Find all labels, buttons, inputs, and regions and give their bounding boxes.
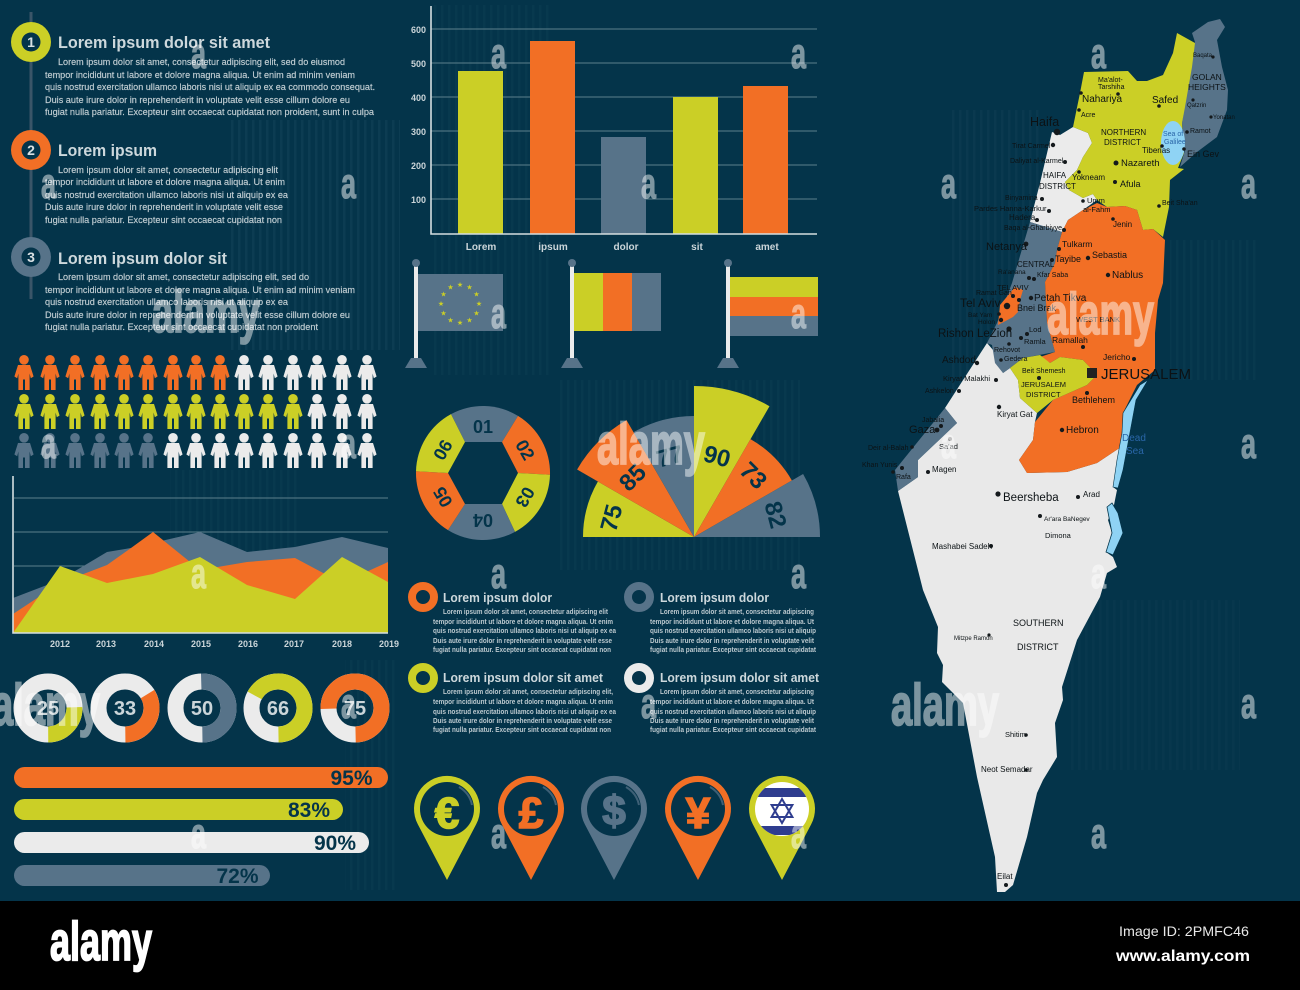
progress bars: 83%	[288, 799, 330, 822]
legend item: white: Lorem ipsum dolor sit amet	[660, 671, 820, 685]
legend item: lime: tempor incididunt ut labore et dolore magna aliqua. Ut enim	[433, 697, 613, 706]
map labels: Arad	[1083, 490, 1100, 499]
map labels: Yokneam	[1072, 173, 1105, 182]
map city dots	[891, 55, 1215, 887]
map labels: Shitim	[1005, 730, 1026, 739]
fan chart: 82	[759, 499, 791, 531]
watermarks: a	[491, 810, 507, 858]
watermarks: a	[341, 680, 357, 728]
map labels: DISTRICT	[1104, 138, 1141, 147]
district: northern	[1065, 33, 1195, 237]
area chart: 2012	[50, 639, 70, 649]
map labels: Dimona	[1045, 531, 1072, 540]
bar chart: 400	[411, 93, 426, 103]
watermarks: a	[791, 290, 807, 338]
map labels: DISTRICT	[1017, 642, 1059, 652]
watermarks: a	[1241, 160, 1257, 208]
area chart: 2017	[284, 639, 304, 649]
block 1: Duis aute irure dolor in reprehenderit in voluptate velit esse cillum dolore eu	[45, 95, 350, 105]
bar chart: 200	[411, 161, 426, 171]
legend item: white: fugiat nulla pariatur. Excepteur sint occaecat cupidatat	[650, 725, 816, 734]
map labels: Bat Yam	[968, 312, 992, 319]
legend item: slate: Duis aute irure dolor in reprehenderit in voluptate velit	[650, 636, 814, 645]
map labels: Kiryat Gat	[997, 410, 1033, 419]
bar chart: 100	[411, 195, 426, 205]
watermarks: alamy	[597, 412, 705, 477]
map labels: Sa'ad	[939, 442, 958, 451]
map labels: Tulkarm	[1062, 239, 1092, 249]
map labels: Netanya	[986, 241, 1028, 253]
block 1: quis nostrud exercitation ullamco laboris nisi ut aliquip ex ea commodo consequat.	[45, 82, 375, 92]
map labels: Nahariya	[1082, 94, 1122, 105]
district: Jerusalem	[1010, 355, 1097, 413]
map labels: al-Fahm	[1083, 205, 1111, 214]
block 3	[11, 237, 355, 332]
hexagon ring chart: 04	[473, 510, 493, 530]
map labels: Bnei Brak	[1017, 303, 1057, 313]
water: Sea of Galilee	[1161, 121, 1185, 165]
map labels: Holon	[978, 319, 995, 326]
fan chart: 90	[701, 441, 733, 473]
legend item: slate	[628, 586, 816, 654]
map labels: Safed	[1152, 95, 1178, 106]
map labels: Yonatan	[1213, 115, 1235, 121]
map of Israel	[862, 19, 1235, 892]
icon: pound pin	[498, 776, 564, 880]
area chart: 2014	[144, 639, 164, 649]
donut charts	[22, 672, 382, 744]
flag: EU: ★	[473, 310, 480, 318]
footer website: www.alamy.com	[1115, 948, 1250, 965]
legend item: orange: fugiat nulla pariatur. Excepteur sint occaecat cupidatat non	[433, 645, 611, 654]
watermarks: a	[941, 160, 957, 208]
map labels: Nablus	[1112, 270, 1143, 281]
map labels: Dead	[1122, 433, 1146, 444]
bar chart: sit	[691, 242, 704, 253]
map labels: Ma'alot-	[1098, 77, 1123, 84]
watermarks: a	[1091, 30, 1107, 78]
watermarks: alamy	[891, 673, 999, 738]
map labels: Ashkelon	[925, 388, 954, 395]
footer logo: alamy	[50, 910, 152, 972]
icon: yen pin	[665, 776, 731, 880]
map labels: Petah Tikva	[1034, 293, 1087, 304]
map labels: Sea of	[1163, 131, 1183, 138]
bar chart: ipsum	[538, 242, 568, 253]
watermarks: a	[1091, 550, 1107, 598]
district: southern	[898, 343, 1121, 892]
map labels: Gedera	[1004, 356, 1027, 363]
map labels: Afula	[1120, 179, 1141, 189]
map labels: Ar'ara BaNegev	[1044, 516, 1090, 523]
footer image id: Image ID: 2PMFC46	[1119, 923, 1249, 939]
progress bars: 72%	[216, 865, 259, 888]
watermarks: alamy	[152, 280, 260, 345]
watermarks: a	[191, 810, 207, 858]
donut charts: 33	[114, 698, 136, 720]
legend item: slate: fugiat nulla pariatur. Excepteur sint occaecat cupidatat	[650, 645, 816, 654]
watermarks: a	[41, 420, 57, 468]
legend item: lime: quis nostrud exercitation ullamco laboris nisi ut aliquip ex ea	[433, 707, 617, 716]
watermarks: a	[1241, 680, 1257, 728]
map labels: NORTHERN	[1101, 128, 1146, 137]
icon: euro pin: €	[435, 789, 459, 838]
map labels: Magen	[932, 465, 956, 474]
region: Gaza	[895, 408, 957, 491]
map labels: JERUSALEM	[1021, 380, 1066, 389]
map labels: Tel Aviv	[960, 296, 1000, 310]
legend item: white: quis nostrud exercitation ullamco laboris nisi ut aliquip	[650, 707, 816, 716]
legend item: white: Lorem ipsum dolor sit amet, consectetur adipiscing	[660, 687, 814, 696]
flag: EU: ★	[447, 316, 454, 324]
map labels: Ramat Gan	[976, 290, 1012, 297]
icon: Jerusalem capital square	[1087, 368, 1097, 378]
bar chart: 500	[411, 59, 426, 69]
map labels: JERUSALEM	[1101, 366, 1191, 383]
map labels: Jabalia	[922, 417, 944, 424]
map labels: Neot Semadar	[981, 765, 1033, 774]
flag: EU: ★	[457, 281, 463, 289]
map labels: Baqata	[1193, 53, 1213, 59]
bar chart: dolor	[614, 242, 639, 253]
map labels: Beit Sha'an	[1162, 200, 1198, 207]
watermarks: alamy	[1047, 282, 1154, 347]
fan chart: 73	[734, 457, 772, 495]
map labels: Ramallah	[1052, 335, 1088, 345]
district: Tel Aviv	[998, 287, 1023, 325]
map labels: Nazareth	[1121, 158, 1160, 169]
map labels: Ramot	[1190, 128, 1211, 135]
bar chart: 600	[411, 25, 426, 35]
watermarks: a	[791, 30, 807, 78]
pictogram: people rows	[14, 355, 377, 468]
progress bars: 90%	[314, 832, 356, 855]
map labels	[862, 53, 1235, 881]
map labels: Rishon LeZion	[938, 328, 1012, 340]
legend item: orange: tempor incididunt ut labore et dolore magna aliqua. Ut enim	[433, 617, 613, 626]
legend item: white	[628, 667, 820, 734]
icon: Israel flag pin	[749, 776, 815, 880]
map labels: Kfar Saba	[1037, 272, 1068, 279]
bar chart: amet	[755, 242, 779, 253]
bar chart: 300	[411, 127, 426, 137]
map labels: Bethlehem	[1072, 395, 1115, 405]
legend item: lime	[412, 667, 617, 734]
map labels: Hebron	[1066, 425, 1099, 436]
hexagon ring chart: 02	[511, 436, 539, 464]
watermarks: a	[641, 160, 657, 208]
hexagon ring chart	[416, 406, 550, 540]
watermarks: a	[341, 160, 357, 208]
map labels: Haifa	[1030, 115, 1059, 129]
watermarks: a	[791, 550, 807, 598]
donut charts: 75	[344, 698, 366, 720]
fan chart: 75	[596, 502, 628, 534]
map labels: Ashdod	[942, 355, 976, 366]
map labels: Rafa	[896, 474, 911, 481]
watermarks: a	[941, 420, 957, 468]
numbered timeline line	[30, 12, 32, 299]
donut charts: 50	[191, 698, 213, 720]
map labels: Pardes Hanna-Karkur	[974, 204, 1047, 213]
map labels: Acre	[1081, 112, 1096, 119]
block 2: Lorem ipsum dolor sit amet, consectetur adipiscing elit	[58, 165, 278, 175]
map labels: TEL AVIV	[997, 283, 1029, 292]
donut charts: 66	[267, 698, 289, 720]
legend item: orange: Lorem ipsum dolor	[443, 591, 552, 605]
block 1: Lorem ipsum dolor sit amet, consectetur adipiscing elit, sed do eiusmod	[58, 57, 345, 67]
water: Dead Sea north	[1113, 380, 1148, 488]
map labels: Beit Shemesh	[1022, 368, 1066, 375]
hexagon ring chart: 05	[429, 483, 457, 511]
legend item: lime: Duis aute irure dolor in reprehenderit in voluptate velit esse	[433, 716, 613, 725]
block 3: Lorem ipsum dolor sit amet, consectetur adipiscing elit, sed do	[58, 272, 309, 282]
block 3: tempor incididunt ut labore et dolore magna aliqua. Ut enim ad minim veniam	[45, 285, 355, 295]
water: Dead Sea south	[1106, 503, 1123, 555]
flag: EU: ★	[466, 284, 473, 292]
watermarks: a	[1091, 810, 1107, 858]
map labels: Rehovot	[994, 347, 1020, 354]
block 2: quis nostrud exercitation ullamco laboris nisi ut aliquip ex ea	[45, 190, 289, 200]
flag: EU: ★	[466, 316, 473, 324]
district: Golan	[1180, 19, 1228, 167]
legend item: white: Duis aute irure dolor in reprehenderit in voluptate velit	[650, 716, 814, 725]
fan chart: 77	[654, 441, 686, 473]
map labels: Baqa al-Gharbiyye	[1004, 225, 1062, 232]
footer bar	[0, 901, 1300, 990]
block 2: 2	[27, 142, 35, 158]
map labels: Hadera	[1009, 213, 1036, 222]
map labels: Sebastia	[1092, 250, 1127, 260]
map labels: Daliyat al-Karmel	[1010, 158, 1064, 165]
block 1: 1	[27, 34, 35, 50]
legend item: orange: Lorem ipsum dolor sit amet, consectetur adipiscing elit	[443, 607, 608, 616]
map labels: Beersheba	[1003, 492, 1059, 504]
legend item: lime: Lorem ipsum dolor sit amet, consectetur adipiscing elit,	[443, 687, 613, 696]
area chart	[13, 476, 399, 649]
map labels: Tiberias	[1142, 146, 1170, 155]
map labels: Galilee	[1164, 139, 1186, 146]
area chart: 2013	[96, 639, 116, 649]
map labels: Binyamina	[1005, 195, 1038, 202]
map labels: Ein Gev	[1187, 149, 1220, 159]
watermarks: a	[491, 30, 507, 78]
block 2: tempor incididunt ut labore et dolore magna aliqua. Ut enim	[45, 177, 285, 187]
area chart: 2015	[191, 639, 211, 649]
icon: dollar pin: $	[602, 787, 626, 834]
flag: EU: ★	[440, 310, 447, 318]
progress bars: 95%	[330, 767, 373, 790]
icon: euro pin	[414, 776, 480, 880]
icon: yen pin: ¥	[686, 789, 711, 838]
area chart: 2016	[238, 639, 258, 649]
donut charts: 25	[37, 698, 59, 720]
map labels: Mashabei Sadeh	[932, 542, 992, 551]
area chart: 2018	[332, 639, 352, 649]
legend item: lime: Lorem ipsum dolor sit amet	[443, 671, 604, 685]
block 1: fugiat nulla pariatur. Excepteur sint occaecat cupidatat non proident, sunt in culpa	[45, 107, 375, 117]
map labels: CENTRAL	[1017, 260, 1055, 269]
map labels: Ra'anana	[998, 269, 1026, 276]
map labels: Ramla	[1024, 337, 1047, 346]
watermarks: a	[791, 810, 807, 858]
watermarks: a	[191, 30, 207, 78]
district: Haifa	[1030, 127, 1097, 232]
district: central	[987, 222, 1062, 373]
icon: pound pin: £	[519, 789, 544, 838]
map labels: Tirat Carmel	[1012, 143, 1051, 150]
map labels: Deir al-Balah	[868, 445, 909, 452]
region: West Bank	[1019, 203, 1165, 473]
block 2: fugiat nulla pariatur. Excepteur sint occaecat cupidatat non	[45, 215, 282, 225]
map labels: DISTRICT	[1039, 182, 1076, 191]
watermarks: a	[41, 160, 57, 208]
legend item: slate: tempor incididunt ut labore et dolore magna aliqua. Ut	[650, 617, 814, 626]
block 3: quis nostrud exercitation ullamco laboris nisi ut aliquip ex ea	[45, 297, 289, 307]
map labels: Tayibe	[1055, 254, 1081, 264]
legend item: slate: Lorem ipsum dolor sit amet, consectetur adipiscing	[660, 607, 814, 616]
map labels: Jericho	[1103, 352, 1131, 362]
fan chart	[577, 386, 820, 537]
block 3: Lorem ipsum dolor sit	[58, 249, 227, 268]
legend item: white: tempor incididunt ut labore et dolore magna aliqua. Ut	[650, 697, 814, 706]
panel: numbered text blocks	[11, 22, 375, 332]
map labels: Sea	[1126, 446, 1144, 457]
block 3: 3	[27, 249, 35, 265]
legend item: orange	[412, 586, 617, 654]
block 2	[11, 130, 289, 225]
block 1: tempor incididunt ut labore et dolore magna aliqua. Ut enim ad minim veniam	[45, 70, 355, 80]
flag: EU: ★	[457, 319, 463, 327]
map labels: SOUTHERN	[1013, 618, 1064, 628]
watermarks: a	[341, 420, 357, 468]
map labels: Kiryat Malakhi	[943, 374, 990, 383]
watermarks: a	[491, 290, 507, 338]
map labels: HEIGHTS	[1188, 82, 1226, 92]
legend item: lime: fugiat nulla pariatur. Excepteur sint occaecat cupidatat non	[433, 725, 611, 734]
legend item: slate: Lorem ipsum dolor	[660, 591, 769, 605]
bar chart: Lorem	[466, 242, 496, 253]
flag: EU	[405, 259, 503, 368]
block 1	[11, 22, 375, 117]
hexagon ring chart: 01	[473, 417, 493, 437]
map labels: GOLAN	[1192, 72, 1222, 82]
map labels: HAIFA	[1043, 171, 1067, 180]
watermarks: a	[491, 550, 507, 598]
map labels: Tarshiha	[1098, 84, 1125, 91]
flag: EU: ★	[440, 290, 447, 298]
map labels: Eilat	[997, 872, 1013, 881]
map labels: WEST BANK	[1076, 315, 1120, 324]
watermarks: a	[641, 680, 657, 728]
map labels: DISTRICT	[1026, 390, 1061, 399]
watermarks: a	[191, 550, 207, 598]
map labels: Gaza	[909, 424, 936, 436]
flag: EU: ★	[438, 300, 444, 308]
map labels: Khan Yunis	[862, 462, 898, 469]
map labels: Mitzpe Ramon	[954, 636, 993, 642]
hexagon ring chart: 06	[429, 436, 457, 464]
legend item: orange: quis nostrud exercitation ullamco laboris nisi ut aliquip ex ea	[433, 626, 617, 635]
flag: EU: ★	[476, 300, 482, 308]
legend text blocks	[412, 586, 820, 734]
block 3: fugiat nulla pariatur. Excepteur sint occaecat cupidatat non proident	[45, 322, 318, 332]
area chart: 2019	[379, 639, 399, 649]
block 3: Duis aute irure dolor in reprehenderit in voluptate velit esse cillum dolore eu	[45, 310, 350, 320]
map labels: Jenin	[1113, 220, 1132, 229]
block 2: Lorem ipsum	[58, 141, 157, 160]
map labels: Lod	[1029, 325, 1042, 334]
hexagon ring chart: 03	[511, 483, 539, 511]
legend item: slate: quis nostrud exercitation ullamco laboris nisi ut aliquip	[650, 626, 816, 635]
fan chart: 85	[614, 459, 652, 497]
flag: horizontal tricolour	[717, 259, 818, 368]
flag: EU: ★	[447, 284, 454, 292]
map labels: Umm	[1087, 196, 1105, 205]
legend item: orange: Duis aute irure dolor in reprehenderit in voluptate velit esse	[433, 636, 613, 645]
bar chart	[411, 6, 817, 253]
progress bars	[14, 767, 388, 888]
icon: dollar pin	[581, 776, 647, 880]
flag: EU: ★	[473, 290, 480, 298]
block 2: Duis aute irure dolor in reprehenderit in voluptate velit esse	[45, 202, 283, 212]
watermarks: a	[1241, 420, 1257, 468]
block 1: Lorem ipsum dolor sit amet	[58, 33, 270, 52]
map labels: Qatzrin	[1187, 103, 1206, 109]
flag: vertical tricolour	[561, 259, 661, 368]
